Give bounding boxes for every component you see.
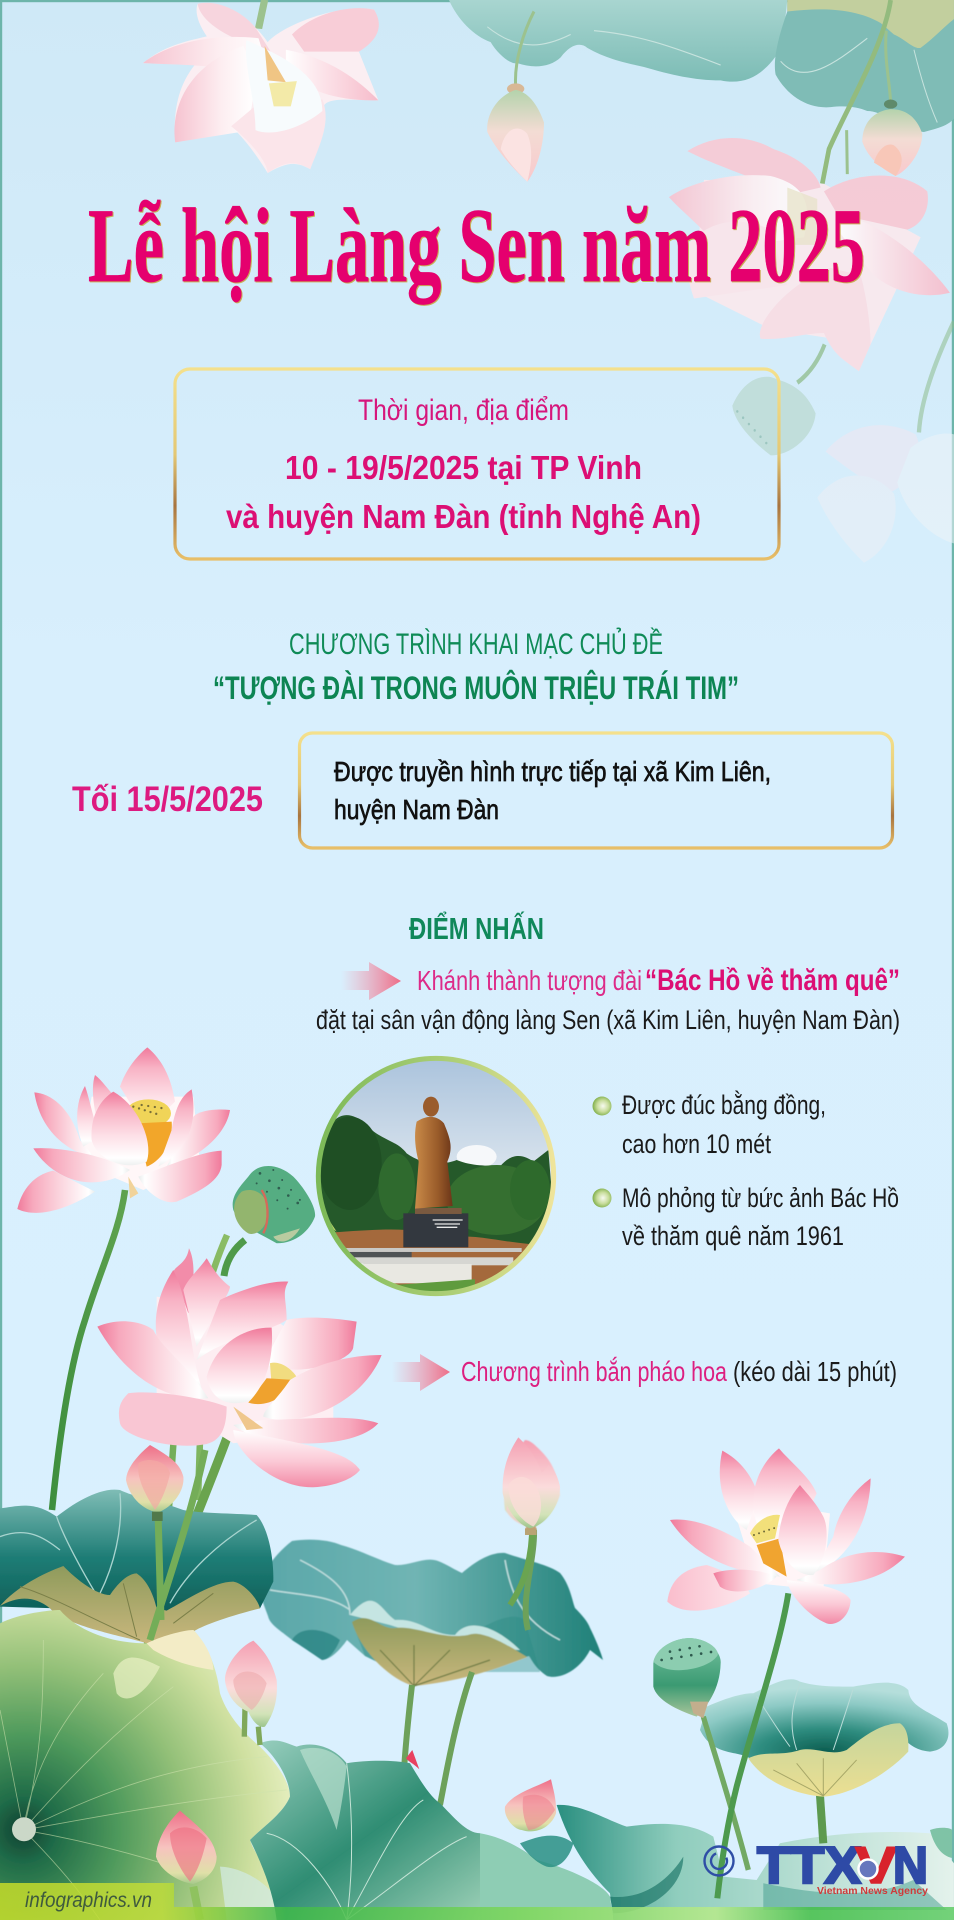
logo: agency name: Vietnam News Agency — [817, 1885, 928, 1897]
text: broadcast line 2: huyện Nam Đàn — [334, 794, 499, 825]
bullet list — [592, 1089, 899, 1251]
leaf underside: top right — [787, 0, 954, 48]
heading: opening programme: CHƯƠNG TRÌNH KHAI MẠC CHỦ ĐỀ — [289, 627, 663, 661]
bud: top right — [862, 100, 922, 176]
bud: above mid leaf — [504, 1440, 560, 1533]
lotus seed pod: right — [653, 1638, 721, 1718]
panel: time and place — [175, 369, 779, 559]
bullet list: cao hơn 10 mét — [622, 1129, 771, 1159]
stem: seed pod — [224, 1240, 245, 1276]
bud: lower, pale pink pair — [225, 1641, 419, 1769]
leaf: top centre — [449, 0, 787, 82]
left stems — [52, 1190, 227, 1640]
text: broadcast line 1: Được truyền hình trực tiếp tại xã Kim Liên, — [334, 756, 771, 787]
lotus leaf: mid teal — [261, 1540, 603, 1686]
bullet: 1961 photo — [592, 1188, 612, 1208]
bullet list: Được đúc bằng đồng, — [622, 1089, 826, 1120]
source: infographics.vn: infographics.vn — [25, 1889, 152, 1912]
lotus flower: faint right edge — [817, 321, 954, 563]
arrow: fireworks item — [392, 1354, 450, 1391]
text: fireworks: (kéo dài 15 phút) — [733, 1356, 897, 1387]
text: dates: 10 - 19/5/2025 tại TP Vinh — [285, 449, 642, 486]
logo: TTXVN: TTX — [757, 1837, 861, 1895]
bud: upper centre-right — [503, 1437, 560, 1535]
lotus leaf: right cup — [700, 1679, 948, 1843]
lotus leaf: lower centre-right — [480, 1805, 954, 1920]
heading: highlights: ĐIỂM NHẤN — [409, 911, 544, 946]
logo: globe — [858, 1860, 878, 1878]
stems: crossing stems at right — [703, 1593, 788, 1898]
lotus flower: upper left — [17, 1047, 230, 1213]
lotus leaf: large green foreground — [0, 1610, 290, 1920]
logo: TTXVN — [757, 1837, 928, 1897]
lotus seed pod: corner — [930, 1828, 952, 1858]
heading: programme theme: “TƯỢNG ĐÀI TRONG MUÔN TRIỆU TRÁI TIM” — [213, 670, 739, 706]
stems: mid leaf — [403, 1530, 534, 1805]
text: statue inauguration — [417, 964, 900, 997]
text: statue inauguration: Khánh thành tượng đài — [417, 965, 642, 996]
lotus flower: large centre left — [97, 1248, 382, 1487]
panel: broadcast — [300, 733, 892, 848]
lotus pod: faded, behind info box — [732, 377, 816, 455]
bud: lower centre, red tip — [505, 1779, 556, 1831]
text: fireworks: Chương trình bắn pháo hoa — [461, 1356, 727, 1387]
bud: lower left, red tip — [156, 1811, 217, 1920]
bud: top centre — [487, 83, 544, 182]
lotus flower: top left, pale — [143, 0, 379, 173]
text: statue inauguration: “Bác Hồ về thăm quê” — [645, 964, 900, 997]
stems — [822, 0, 891, 184]
bud: left, pink and green — [126, 1445, 183, 1521]
heading: time and place: Thời gian, địa điểm — [358, 394, 569, 427]
lotus leaf: lower green teal — [250, 1740, 500, 1920]
stem: flower 2 to leaf — [148, 1435, 228, 1645]
icon: copyright — [704, 1846, 734, 1876]
bud: stem from upper centre-right bud to leaf — [510, 1535, 532, 1605]
date label: Tối 15/5/2025 — [72, 780, 263, 819]
bullet: bronze — [592, 1096, 612, 1116]
logo: TTXVN: N — [893, 1837, 928, 1895]
logo: red V: V — [855, 1837, 897, 1895]
stems over left leaf — [150, 1450, 205, 1640]
lotus leaf: left teal with tan underside — [0, 1490, 273, 1643]
leaf: top right — [775, 0, 954, 132]
lotus seed pod: centre left — [233, 1166, 315, 1243]
arrow: statue item — [341, 962, 401, 1000]
bottom strip — [0, 1883, 954, 1920]
lotus flower: top right, pale — [669, 138, 950, 383]
lotus flower: lower right — [667, 1448, 905, 1624]
bullet list: về thăm quê năm 1961 — [622, 1221, 844, 1251]
top foliage: faded leaves, stems and buds — [449, 0, 954, 184]
text: location: và huyện Nam Đàn (tỉnh Nghệ An) — [226, 498, 701, 535]
photo: statue in circle — [313, 1053, 560, 1307]
